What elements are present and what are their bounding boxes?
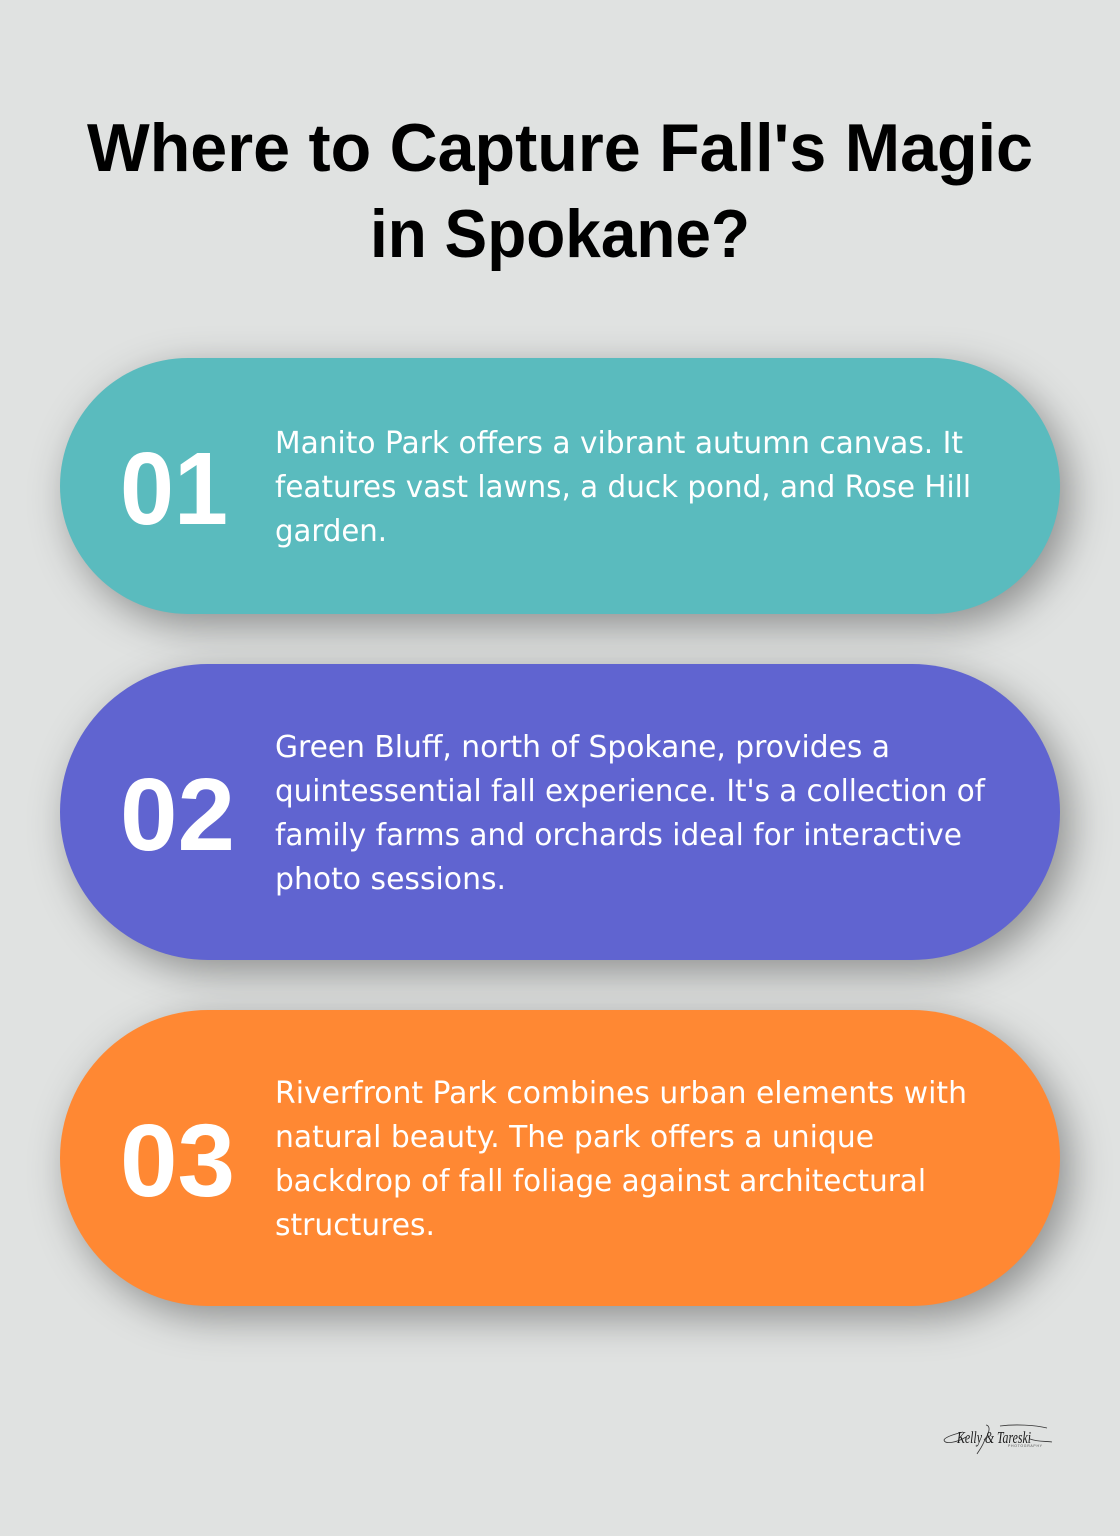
number 01: 01	[120, 431, 228, 546]
logo: Kelly & Tareski Photography signature: PHOTOGRAPHY	[1008, 1444, 1043, 1448]
title: Where to Capture Fall's Magic	[87, 110, 1033, 186]
text: Green Bluff: Green Bluff, north of Spokane, provides a	[275, 730, 890, 765]
pill background: orange	[60, 1010, 1060, 1306]
text: Green Bluff: quintessential fall experience. It's a collection of	[275, 774, 986, 809]
number 02: 02	[120, 757, 235, 872]
number 03: 03	[120, 1103, 235, 1218]
title: in Spokane?	[370, 196, 750, 272]
panel: step 01 Manito Park	[60, 358, 1070, 626]
logo: Kelly & Tareski Photography signature	[944, 1425, 1052, 1454]
text: Green Bluff	[275, 730, 986, 897]
text: Riverfront Park: backdrop of fall foliage against architectural	[275, 1164, 926, 1199]
text: Green Bluff: family farms and orchards ideal for interactive	[275, 818, 962, 853]
text: Riverfront Park	[275, 1076, 967, 1243]
text: Riverfront Park: Riverfront Park combines urban elements with	[275, 1076, 967, 1111]
pill background: purple	[60, 664, 1060, 960]
text: Manito Park: features vast lawns, a duck pond, and Rose Hill	[275, 470, 971, 505]
panel: step 02 Green Bluff	[60, 664, 1070, 972]
text: Manito Park: garden.	[275, 514, 387, 549]
text: Riverfront Park: natural beauty. The park offers a unique	[275, 1120, 874, 1155]
pill background: teal	[60, 358, 1060, 614]
text: Green Bluff: photo sessions.	[275, 862, 506, 897]
text: Manito Park	[275, 426, 971, 549]
panel: step 03 Riverfront Park	[60, 1010, 1070, 1318]
text: Riverfront Park: structures.	[275, 1208, 435, 1243]
logo: Kelly & Tareski Photography signature: Kelly & Tareski	[956, 1428, 1031, 1447]
title	[87, 110, 1033, 272]
text: Manito Park: Manito Park offers a vibrant autumn canvas. It	[275, 426, 963, 461]
